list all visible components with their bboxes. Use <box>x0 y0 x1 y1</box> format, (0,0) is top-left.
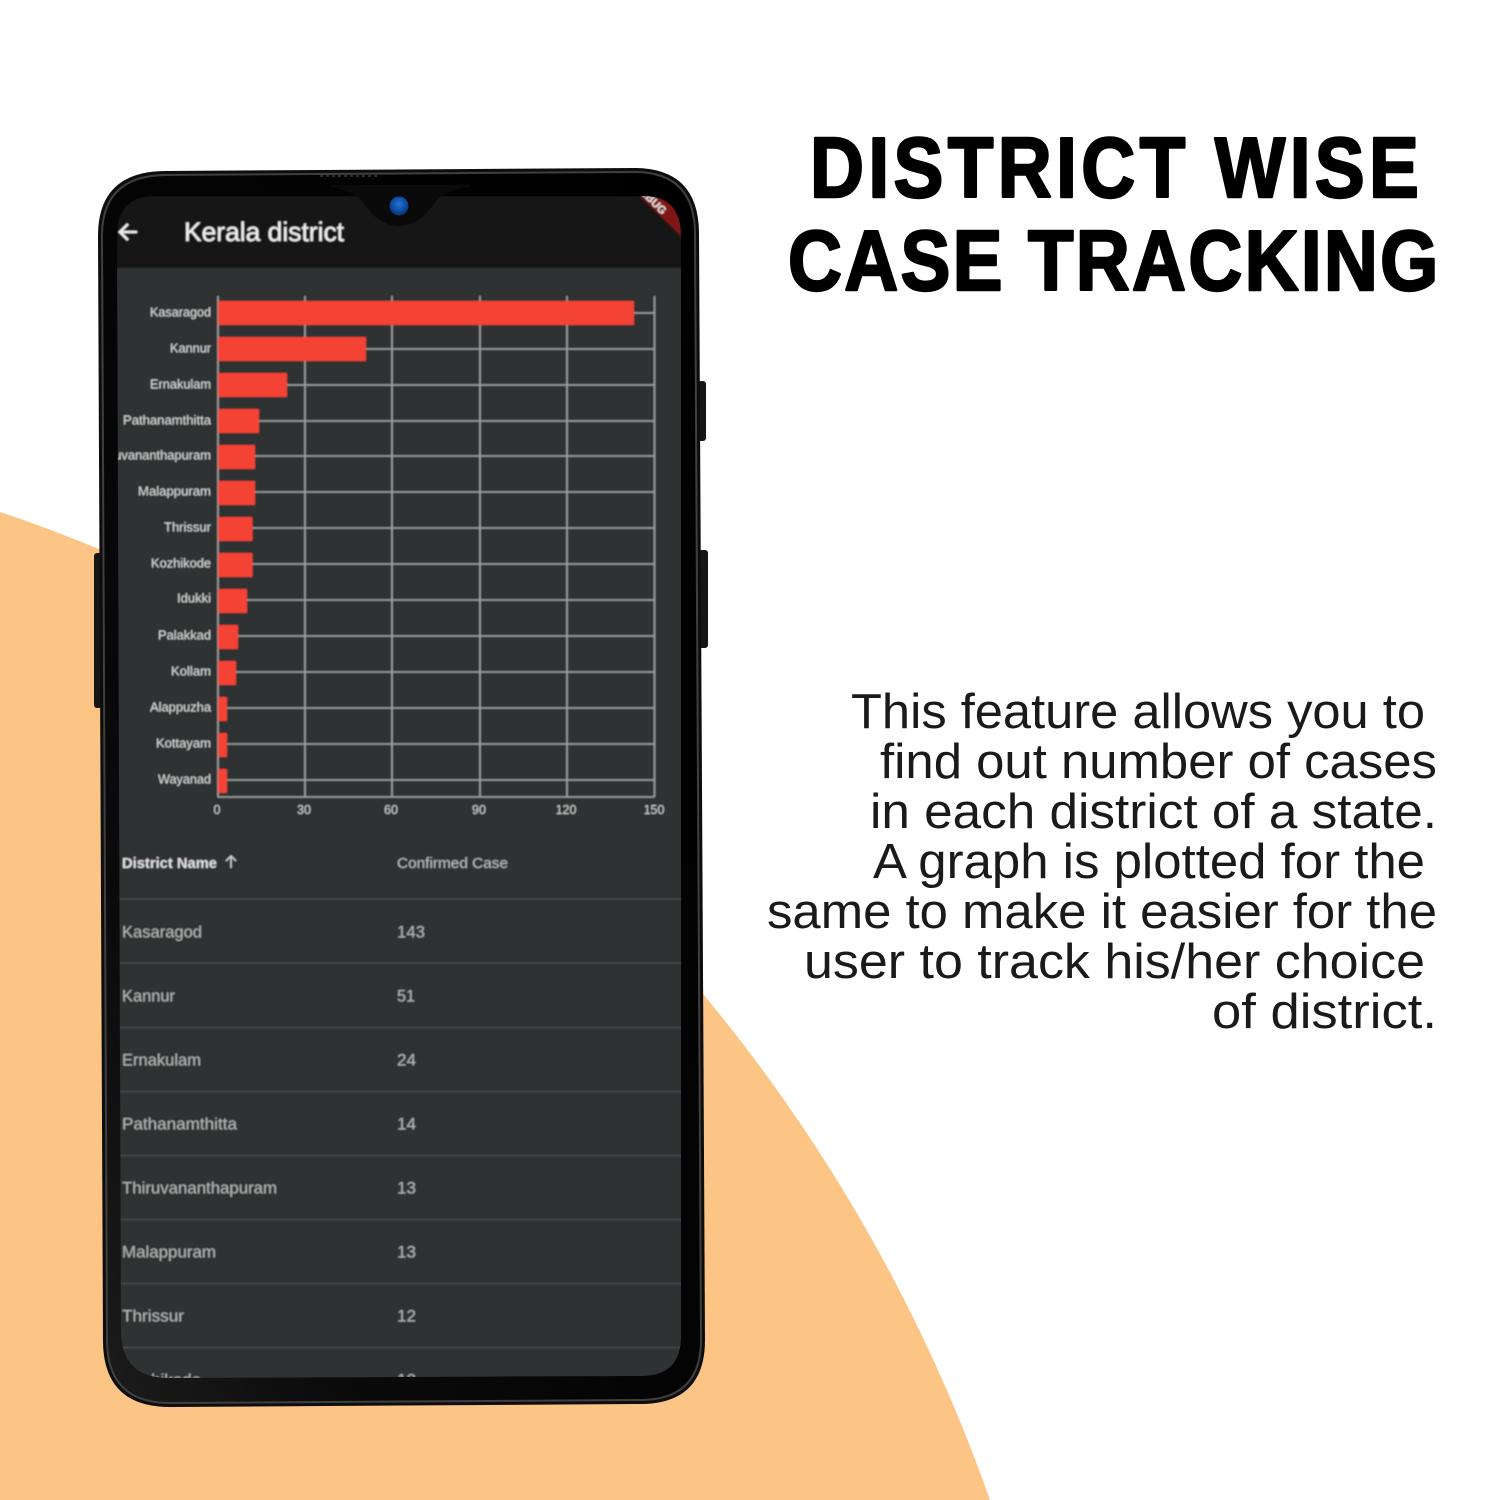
table rows: Ernakulam <box>122 1052 201 1070</box>
chart axis labels: 60 <box>384 803 398 817</box>
table rows: 14 <box>397 1116 416 1134</box>
phone body <box>98 168 705 1407</box>
table rows <box>122 924 425 1390</box>
chart axis labels: 30 <box>297 803 311 817</box>
chart axis labels: 90 <box>472 803 486 817</box>
chart category labels: Kasaragod <box>150 306 211 320</box>
table rows: Pathanamthitta <box>122 1116 238 1134</box>
chart category labels: Palakkad <box>158 628 211 642</box>
chart category labels: Malappuram <box>138 484 211 498</box>
screen <box>92 181 683 1390</box>
title <box>788 121 1438 308</box>
bar chart <box>92 296 664 817</box>
table rows: 24 <box>397 1052 416 1070</box>
description text block <box>767 685 1437 1039</box>
description text block: of district. <box>1212 985 1437 1039</box>
table rows: 51 <box>397 988 415 1006</box>
app bar <box>117 196 681 268</box>
chart axis labels: 0 <box>214 803 221 817</box>
chart axis labels: 120 <box>556 803 576 817</box>
chart category labels: Kottayam <box>156 736 211 750</box>
table rows: Malappuram <box>122 1244 216 1262</box>
chart axis labels: 150 <box>644 803 664 817</box>
chart grid <box>218 296 654 797</box>
chart category labels <box>118 306 212 788</box>
chart axis labels <box>212 804 666 816</box>
phone mockup <box>92 168 708 1407</box>
table rows: 13 <box>397 1244 416 1262</box>
table rows: Kozhikode <box>122 1372 201 1390</box>
speaker <box>320 175 380 177</box>
description text block: find out number of cases <box>880 735 1437 789</box>
side buttons <box>94 381 708 708</box>
table header: Confirmed Case <box>397 856 508 872</box>
table dividers <box>115 899 683 1348</box>
description text block: in each district of a state. <box>870 785 1437 839</box>
chart category labels: Alappuzha <box>150 700 211 714</box>
title: CASE TRACKING <box>788 214 1438 308</box>
table header <box>122 856 508 872</box>
chart category labels: Kozhikode <box>151 556 211 570</box>
description text block: same to make it easier for the <box>767 885 1437 939</box>
background shape: peach curve <box>0 512 990 1500</box>
app bar title: Kerala district <box>184 217 344 247</box>
table rows: 13 <box>397 1180 416 1198</box>
chart category labels: Wayanad <box>158 772 211 786</box>
table rows: Kasaragod <box>122 924 202 942</box>
title: DISTRICT WISE <box>810 121 1419 215</box>
chart category labels: Idukki <box>177 592 211 606</box>
description text block: user to track his/her choice <box>804 935 1425 989</box>
description text block: A graph is plotted for the <box>873 835 1425 889</box>
icon: sort arrow <box>226 856 236 868</box>
chart category labels: Pathanamthitta <box>123 414 211 428</box>
phone rim <box>102 172 701 1403</box>
icon: back arrow <box>120 224 137 240</box>
chart category labels: Kannur <box>170 342 211 356</box>
table rows: 143 <box>397 924 425 942</box>
chart category labels: Thrissur <box>164 520 211 534</box>
debug ribbon <box>639 196 681 238</box>
chart bars <box>218 301 634 793</box>
table rows: Thiruvananthapuram <box>122 1180 277 1198</box>
icon: front camera <box>390 196 408 216</box>
table rows: 12 <box>397 1308 416 1326</box>
description text block: This feature allows you to <box>851 685 1425 739</box>
debug ribbon: DEBUG <box>632 181 668 217</box>
table header: District Name <box>122 856 217 872</box>
table rows: 12 <box>397 1372 416 1390</box>
table rows: Kannur <box>122 988 175 1006</box>
table rows: Thrissur <box>122 1308 185 1326</box>
data table <box>115 856 683 1390</box>
chart category labels: Thiruvananthapuram <box>92 448 211 462</box>
notch <box>330 185 470 226</box>
chart category labels: Kollam <box>171 664 211 678</box>
chart category labels: Ernakulam <box>150 378 211 392</box>
